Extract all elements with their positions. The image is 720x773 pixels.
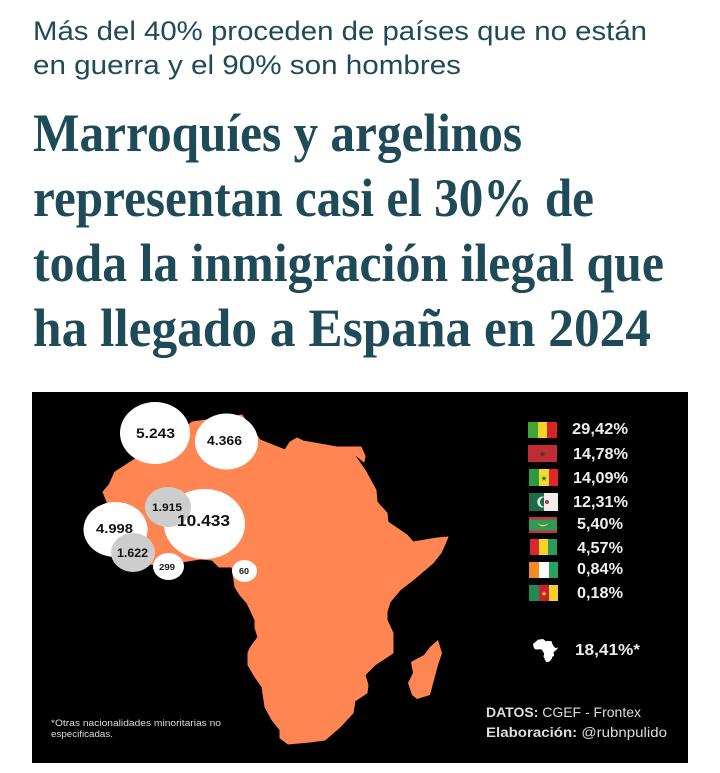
- title: ha llegado a España en 2024: [33, 298, 651, 358]
- bubble: 4.998: [84, 502, 148, 557]
- legend row: Mauritania 5,40%: 5,40%: [577, 516, 623, 533]
- bubble: 4.366: [195, 414, 258, 470]
- legend row: Marruecos 14,78%: [528, 445, 628, 463]
- legend row: Senegal 14,09%: ★: [540, 474, 548, 483]
- bubble: 1.915: 1.915: [152, 502, 182, 514]
- others percentage: 18,41%*: [575, 642, 641, 659]
- map: Africa: [103, 415, 448, 744]
- icon: Africa silhouette: [533, 639, 558, 662]
- legend row: Mauritania 5,40%: [529, 516, 623, 533]
- credits: DATOS: CGEF - Frontex: [486, 704, 641, 720]
- legend row: Mali 29,42%: [528, 421, 628, 438]
- legend row: Camerún 0,18%: [529, 585, 623, 602]
- subtitle: Más del 40% proceden de países que no están: [33, 16, 647, 46]
- legend row: Argelia 12,31%: 12,31%: [573, 494, 628, 511]
- legend row: Camerún 0,18%: 0,18%: [577, 585, 623, 602]
- title: representan casi el 30% de: [33, 168, 594, 228]
- legend row: Costa de Marfil 0,84%: 0,84%: [577, 561, 623, 578]
- bubble: 1.622: 1.622: [117, 548, 148, 560]
- credits: [486, 704, 667, 740]
- bubble: 299: 299: [159, 562, 175, 572]
- map: Madagascar: [408, 640, 442, 699]
- legend row: Camerún 0,18%: ★: [541, 590, 547, 598]
- credits: Elaboración: @rubnpulido: [486, 724, 667, 740]
- bubble: 4.366: 4.366: [207, 433, 242, 448]
- title: Marroquíes y argelinos: [33, 103, 522, 163]
- bubble: 4.998: 4.998: [96, 521, 133, 536]
- legend row: Argelia 12,31%: [529, 493, 628, 511]
- legend row: Guinea 4,57%: 4,57%: [577, 540, 623, 557]
- footnote: [51, 718, 221, 739]
- bubble: 60: [232, 560, 257, 582]
- legend row: Costa de Marfil 0,84%: [529, 561, 623, 578]
- title: [33, 103, 664, 358]
- bubble: 10.433: 10.433: [177, 513, 230, 530]
- footnote: especificadas.: [51, 729, 113, 739]
- legend row: Marruecos 14,78%: 14,78%: [573, 446, 628, 463]
- legend row: Marruecos 14,78%: ★: [538, 450, 547, 460]
- infographic panel: [32, 392, 688, 763]
- legend row: Senegal 14,09%: [529, 469, 628, 487]
- bubble: 60: 60: [239, 567, 250, 576]
- bubble: 1.622: [111, 533, 155, 572]
- legend row: Guinea 4,57%: [530, 539, 623, 557]
- legend row: Senegal 14,09%: 14,09%: [573, 470, 628, 487]
- title: toda la inmigración ilegal que: [33, 233, 664, 293]
- legend row: Mali 29,42%: 29,42%: [572, 421, 628, 438]
- bubble: 5.243: [120, 402, 190, 464]
- bubble: 10.433: [145, 487, 245, 559]
- subtitle: [33, 16, 647, 80]
- bubble: 5.243: 5.243: [136, 425, 175, 441]
- footnote: *Otras nacionalidades minoritarias no: [51, 718, 221, 728]
- bubble: 299: [153, 553, 184, 580]
- subtitle: en guerra y el 90% son hombres: [33, 50, 461, 80]
